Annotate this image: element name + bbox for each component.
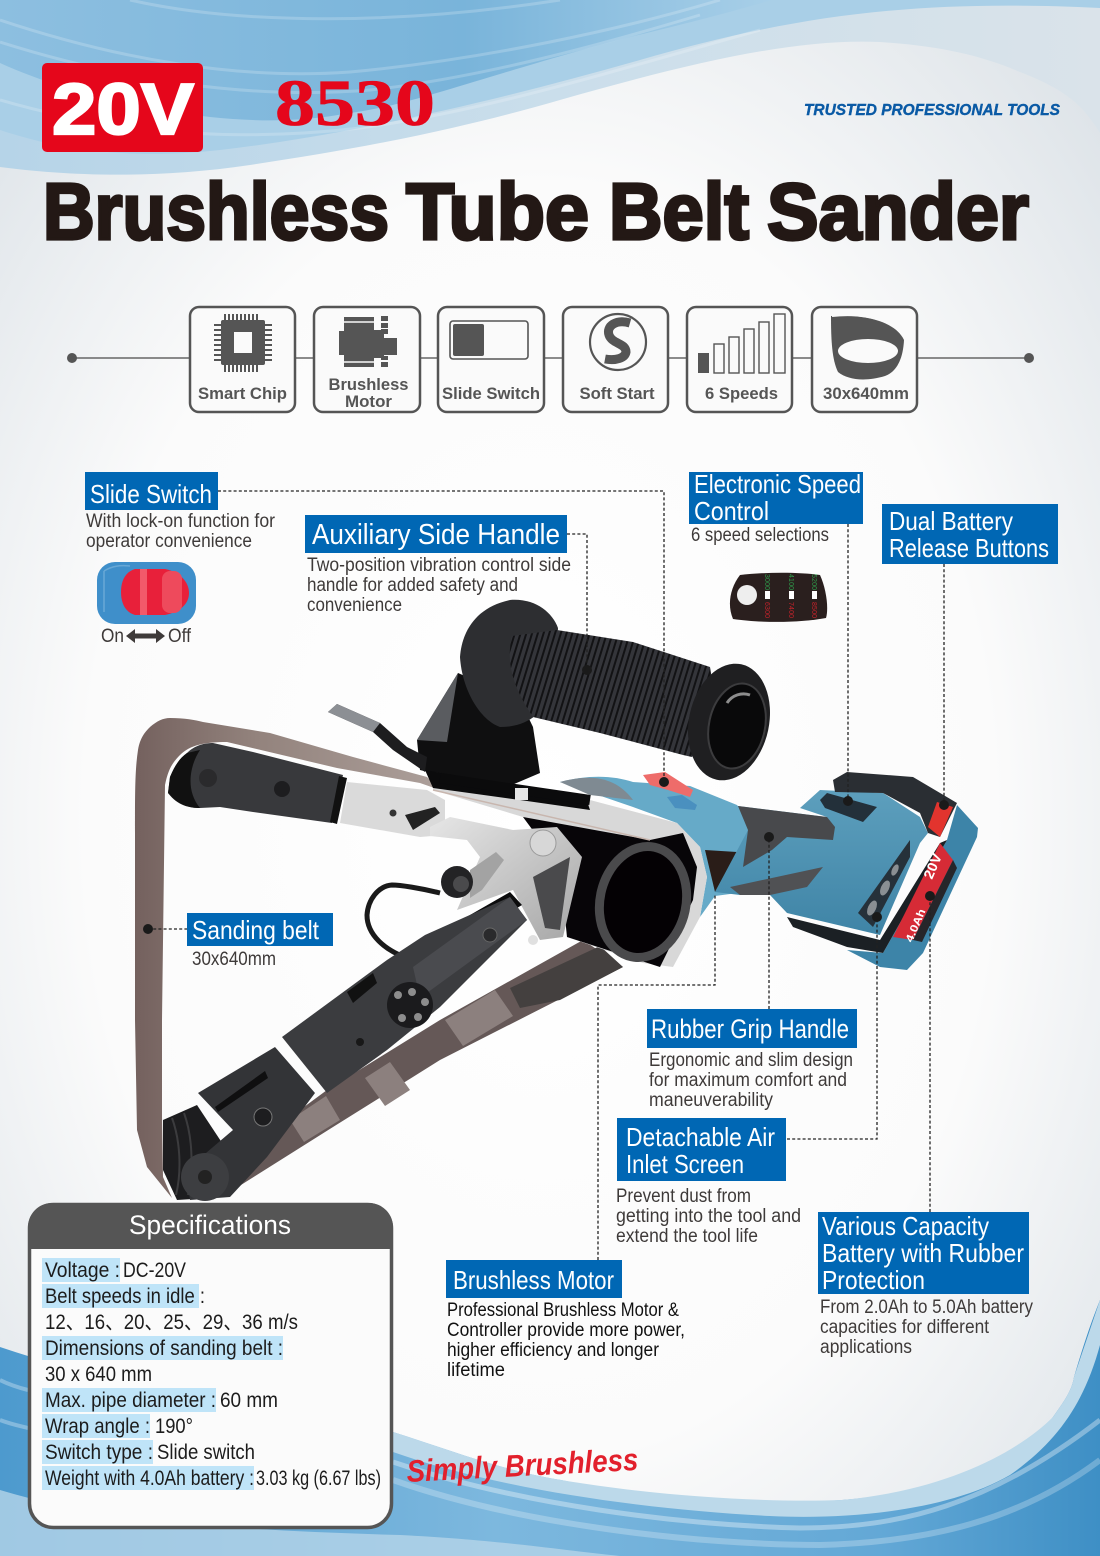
tension lever	[367, 866, 522, 966]
lower arm	[282, 897, 527, 1093]
callout: various capacity battery: applications	[820, 1337, 912, 1358]
lower belt strip	[205, 940, 623, 1190]
callout: rubber grip handle	[647, 832, 857, 1111]
callout: brushless motor: Professional Brushless Motor &	[447, 1300, 679, 1321]
callout: slide switch	[85, 472, 669, 787]
icon: 6 speeds	[687, 307, 792, 412]
icon: soft start	[563, 307, 668, 412]
side handle	[328, 600, 780, 790]
icon: brushless motor	[314, 307, 420, 412]
product photo: tube belt sander	[135, 600, 978, 1201]
callout: dual battery release buttons: Dual Battery	[889, 506, 1013, 536]
badge: 20V: 20V	[52, 70, 194, 150]
panel: specifications	[28, 1203, 393, 1528]
spec list: Slide switch	[157, 1441, 255, 1464]
callout: slide switch: operator convenience	[86, 531, 252, 552]
callout: rubber grip handle: maneuverability	[649, 1090, 773, 1111]
spec list: Weight with 4.0Ah battery :	[45, 1467, 254, 1490]
icon: speed panel	[730, 573, 827, 622]
icon: soft start: Soft Start	[580, 385, 655, 403]
callout: slide switch: With lock-on function for	[86, 511, 276, 532]
title: Tube	[406, 167, 589, 256]
callout: electronic speed control: Electronic Speed	[694, 469, 861, 499]
callout: auxiliary side handle: Two-position vibration control side	[307, 555, 571, 576]
callout: dual battery release buttons: Release Buttons	[889, 533, 1049, 563]
callout: various capacity battery: capacities for different	[820, 1317, 990, 1338]
lower end block and roller	[163, 1047, 315, 1201]
battery: 20V	[920, 850, 945, 881]
callout: electronic speed control	[689, 469, 863, 806]
spec list: Switch type :	[45, 1441, 153, 1464]
title: Sander	[767, 167, 1029, 256]
spec list: DC-20V	[123, 1259, 186, 1282]
icon: brushless motor: Brushless	[328, 376, 408, 394]
icon: speed panel: 6300	[763, 602, 770, 618]
callout: brushless motor: Controller provide more power,	[447, 1320, 685, 1341]
callout: rubber grip handle: Rubber Grip Handle	[651, 1014, 849, 1044]
feature icon row	[67, 307, 1034, 412]
model number: 8530	[275, 67, 435, 140]
spec list: 12、16、20、25、29、36 m/s	[45, 1311, 298, 1334]
callout: various capacity battery: From 2.0Ah to 5.0Ah battery	[820, 1297, 1033, 1318]
spec list: 30 x 640 mm	[45, 1363, 152, 1386]
icon: 6 speeds: 6 Speeds	[705, 385, 778, 403]
silver frame	[340, 782, 445, 837]
callout: various capacity battery	[818, 891, 1033, 1358]
icon: smart chip: Smart Chip	[198, 385, 287, 403]
callout: brushless motor: Brushless Motor	[453, 1265, 614, 1295]
icon: slide switch	[438, 307, 544, 412]
rear housing	[715, 790, 928, 935]
callout: auxiliary side handle: handle for added safety and	[307, 575, 518, 596]
callout: various capacity battery: Protection	[822, 1265, 925, 1295]
callout: brushless motor	[446, 895, 715, 1381]
callout: electronic speed control: 6 speed selections	[691, 525, 829, 546]
belt top and left	[135, 718, 440, 1198]
callout: auxiliary side handle: Auxiliary Side Handle	[312, 519, 560, 551]
title: Brushless	[43, 167, 389, 256]
spec list	[45, 1259, 381, 1490]
callout: electronic speed control: Control	[694, 496, 769, 526]
callout: various capacity battery: Battery with Rubber	[822, 1238, 1024, 1268]
title: Belt	[609, 167, 749, 256]
callout: sanding belt	[143, 913, 333, 970]
callout: brushless motor: higher efficiency and longer	[447, 1340, 660, 1361]
icon: on-off switch: Off	[168, 626, 192, 647]
upper arm	[168, 743, 347, 824]
battery	[787, 772, 978, 970]
callout: auxiliary side handle	[305, 515, 592, 675]
highlights	[42, 1258, 283, 1490]
motor neck	[560, 772, 760, 917]
icon: speed panel: 4100	[787, 574, 794, 590]
icon: on-off switch: On	[101, 626, 124, 647]
icon: belt size	[812, 307, 917, 412]
icon: speed panel: 5200	[810, 574, 817, 590]
icon: speed panel: 8500	[810, 602, 817, 618]
callout: sanding belt: 30x640mm	[192, 949, 276, 970]
spec list: Wrap angle :	[45, 1415, 150, 1438]
spec list: Belt speeds in idle :	[45, 1285, 205, 1308]
icon: speed panel: 7400	[787, 602, 794, 618]
aluminium bracket	[430, 817, 582, 945]
callout: dual battery release buttons	[882, 504, 1058, 810]
callout: detachable air inlet screen: Prevent dust from	[616, 1186, 751, 1207]
callout: rubber grip handle: Ergonomic and slim design	[649, 1050, 853, 1071]
icon: brushless motor: Motor	[345, 393, 393, 411]
icon: slide switch: Slide Switch	[442, 385, 540, 403]
heading: Specifications	[129, 1210, 291, 1240]
callout: detachable air inlet screen: Detachable Air	[626, 1122, 775, 1152]
spec list: Max. pipe diameter :	[45, 1389, 216, 1412]
belt guard and drum	[425, 770, 707, 967]
icon: belt size: 30x640mm	[823, 385, 909, 403]
spec list: Dimensions of sanding belt :	[45, 1337, 283, 1360]
callout: brushless motor: lifetime	[447, 1360, 505, 1381]
icon: on-off switch	[97, 562, 196, 647]
spec list: Voltage :	[45, 1259, 120, 1282]
callout: auxiliary side handle: convenience	[307, 595, 402, 616]
callout: various capacity battery: Various Capacity	[822, 1211, 989, 1241]
callout: detachable air inlet screen: Inlet Screen	[626, 1149, 744, 1179]
spec list: 60 mm	[220, 1389, 278, 1412]
spec list: 3.03 kg (6.67 lbs)	[256, 1467, 381, 1490]
callout: slide switch: Slide Switch	[90, 479, 212, 509]
callout: sanding belt: Sanding belt	[192, 915, 320, 945]
callout: detachable air inlet screen	[616, 912, 882, 1247]
spec list: 190°	[155, 1415, 193, 1438]
slogan: Simply Brushless	[406, 1442, 639, 1489]
callout: detachable air inlet screen: getting into the tool and	[616, 1206, 801, 1227]
battery: 4.0Ah	[904, 907, 929, 944]
callout: detachable air inlet screen: extend the tool life	[616, 1226, 758, 1247]
title	[43, 167, 1029, 256]
callout: rubber grip handle: for maximum comfort and	[649, 1070, 847, 1091]
icon: speed panel: 3000	[763, 574, 770, 590]
tagline: TRUSTED PROFESSIONAL TOOLS	[804, 102, 1061, 119]
icon: smart chip	[190, 307, 295, 412]
